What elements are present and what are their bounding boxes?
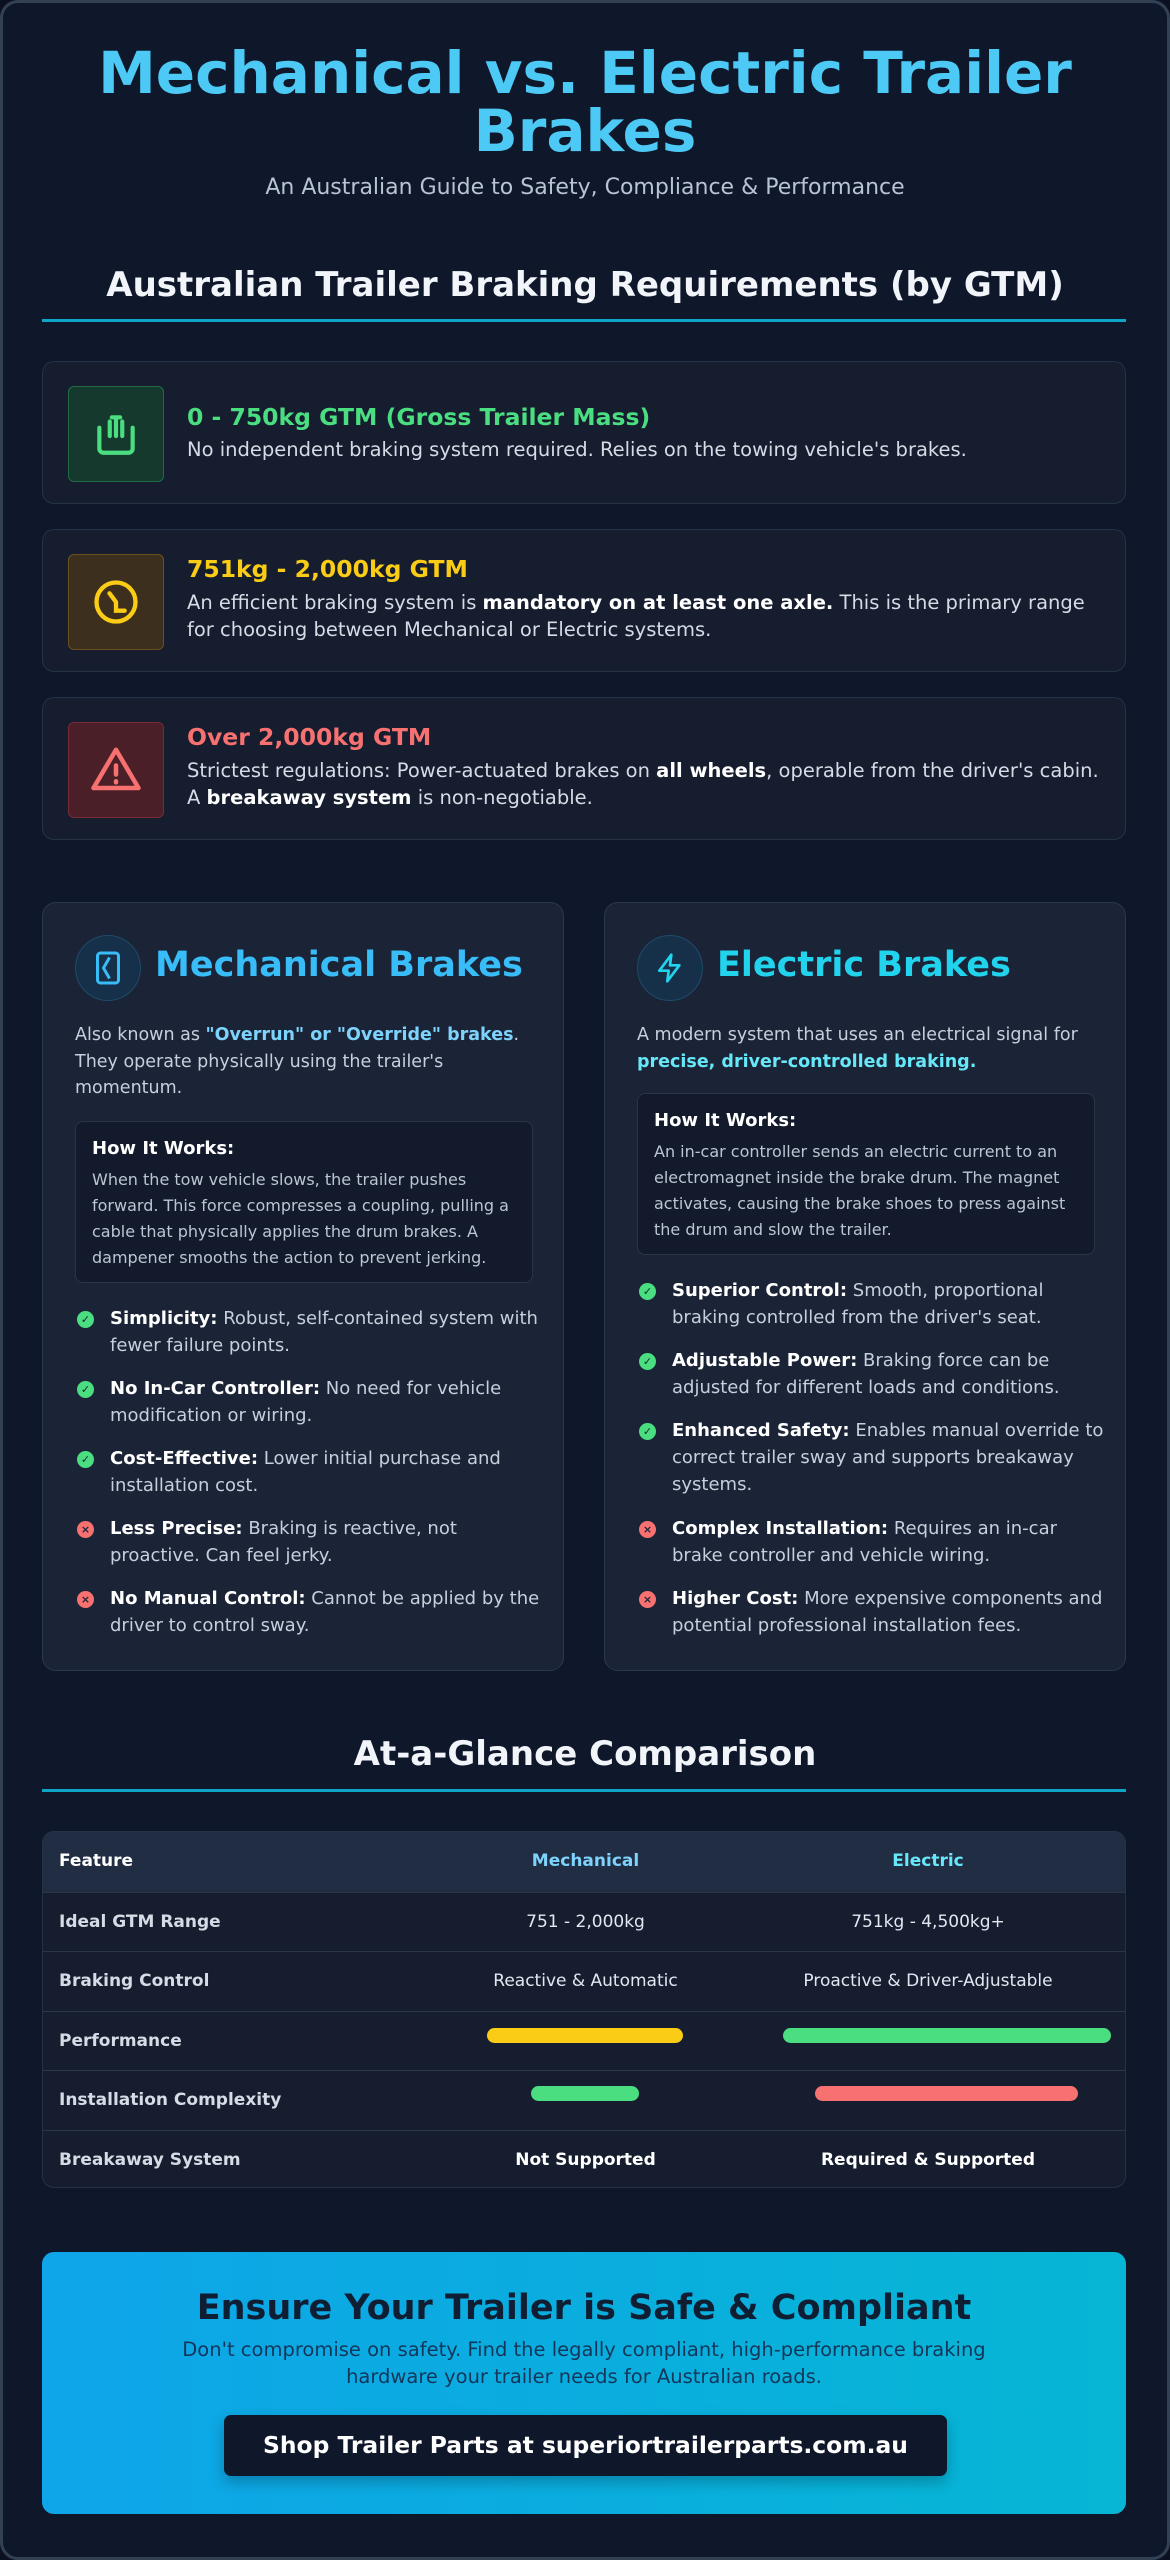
panel: electric: × [643,1593,652,1606]
panel: mechanical: × [81,1523,90,1536]
panel: electric: ✓ [643,1355,652,1368]
comparison table: Braking Control [59,1971,209,1991]
complexity bars [43,2070,1127,2130]
cta text: Don't compromise on safety. Find the legally compliant, high-performance braking hardware your trailer needs for Australian roads. [182,2338,986,2388]
how it works: How It Works: [654,1110,796,1131]
comparison table: 751 - 2,000kg [526,1912,645,1932]
card: 0-750kg: No independent braking system required. Relies on the towing vehicle's brakes. [187,438,967,461]
title: Mechanical vs. Electric Trailer [98,39,1072,107]
icon: gauge [68,554,164,650]
card: 0-750kg [42,361,1126,504]
panel: mechanical: Also known as "Overrun" or "Override" brakes. They operate physically using the trailer's momentum. [75,1025,519,1098]
how it works: An in-car controller sends an electric current to an electromagnet inside the brake drum. The magnet activates, causing the brake shoes to press against the drum and slow the trailer. [654,1142,1065,1239]
panel: mechanical: ✓ [81,1453,90,1466]
icon: trailer [68,386,164,482]
list: pros and cons: Simplicity: Robust, self-contained system with fewer failure points. [110,1308,538,1356]
panel: electric: Electric Brakes [717,945,1011,985]
performance bars: Performance [59,2030,182,2050]
panel: mechanical [42,902,564,1671]
call to action [42,2252,1126,2514]
card: 751-2000kg: An efficient braking system is mandatory on at least one axle. This is the primary range for choosing between Mechanical or Electric systems. [187,591,1085,641]
panel: electric: ✓ [643,1425,652,1438]
how it works: When the tow vehicle slows, the trailer pushes forward. This force compresses a coupling, pulling a cable that physically applies the drum brakes. A dampener smooths the action to prevent jerking. [92,1170,509,1267]
card: over 2000kg [42,697,1126,840]
panel: electric: Higher Cost: More expensive components and potential professional installation fees. [672,1588,1102,1636]
heading: comparison: At-a-Glance Comparison [354,1734,816,1774]
panel: mechanical: Less Precise: Braking is reactive, not proactive. Can feel jerky. [110,1518,457,1566]
subtitle: An Australian Guide to Safety, Compliance & Performance [265,175,905,200]
panel: mechanical: × [81,1593,90,1606]
comparison table: 751kg - 4,500kg+ [851,1912,1005,1932]
icon: warning [68,722,164,818]
icon: lightning [637,935,703,1001]
panel: electric: Complex Installation: Requires an in-car brake controller and vehicle wiring. [672,1518,1057,1566]
comparison table: Mechanical [532,1851,639,1871]
comparison table: Reactive & Automatic [493,1971,678,1991]
card: 751-2000kg [42,529,1126,672]
button: Shop Trailer Parts at superiortrailerparts.com.au [263,2431,908,2459]
list: pros and cons: ✓ [81,1313,90,1326]
card: over 2000kg: Strictest regulations: Power-actuated brakes on all wheels, operable from the driver's cabin. A breakaway system is non-negotiable. [187,759,1099,809]
text: 0 - 750kg GTM (Gross Trailer Mass) [187,403,650,431]
heading: Mechanical Brakes [155,945,523,985]
how it works: How It Works: [92,1138,234,1159]
panel: mechanical: ✓ [81,1383,90,1396]
panel: electric: Adjustable Power: Braking force can be adjusted for different loads and conditions. [672,1350,1060,1398]
card: over 2000kg: Over 2,000kg GTM [187,723,431,751]
list: pros and cons: ✓ [643,1285,652,1298]
comparison table [42,1831,1126,2188]
how it works [75,1121,533,1283]
panel: electric: Enhanced Safety: Enables manual override to correct trailer sway and supports breakaway systems. [672,1420,1103,1495]
comparison table: Not Supported [515,2150,656,2170]
comparison table: Feature [59,1851,133,1871]
how it works [637,1093,1095,1255]
icon: mechanical [75,935,141,1001]
performance bars [43,2010,1127,2070]
panel: mechanical: No Manual Control: Cannot be applied by the driver to control sway. [110,1588,539,1636]
panel: electric: × [643,1523,652,1536]
card: 751-2000kg: 751kg - 2,000kg GTM [187,555,468,583]
comparison table: Required & Supported [821,2150,1035,2170]
comparison table: Electric [892,1851,964,1871]
panel: mechanical: Cost-Effective: Lower initial purchase and installation cost. [110,1448,501,1496]
panel: electric [604,902,1126,1671]
complexity bars: Installation Complexity [59,2090,281,2110]
panel: electric: A modern system that uses an electrical signal for precise, driver-controlled braking. [637,1025,1078,1072]
comparison table: Proactive & Driver-Adjustable [803,1971,1053,1991]
title: Brakes [474,97,696,165]
cta heading: Ensure Your Trailer is Safe & Compliant [197,2288,971,2328]
button [224,2415,947,2476]
title [98,39,1072,165]
panel: mechanical: No In-Car Controller: No need for vehicle modification or wiring. [110,1378,501,1426]
comparison table: Ideal GTM Range [59,1912,221,1932]
list: pros and cons: Superior Control: Smooth, proportional braking controlled from the driver's seat. [672,1280,1043,1328]
comparison table: Breakaway System [59,2150,241,2170]
heading: requirements: Australian Trailer Braking Requirements (by GTM) [106,265,1064,305]
